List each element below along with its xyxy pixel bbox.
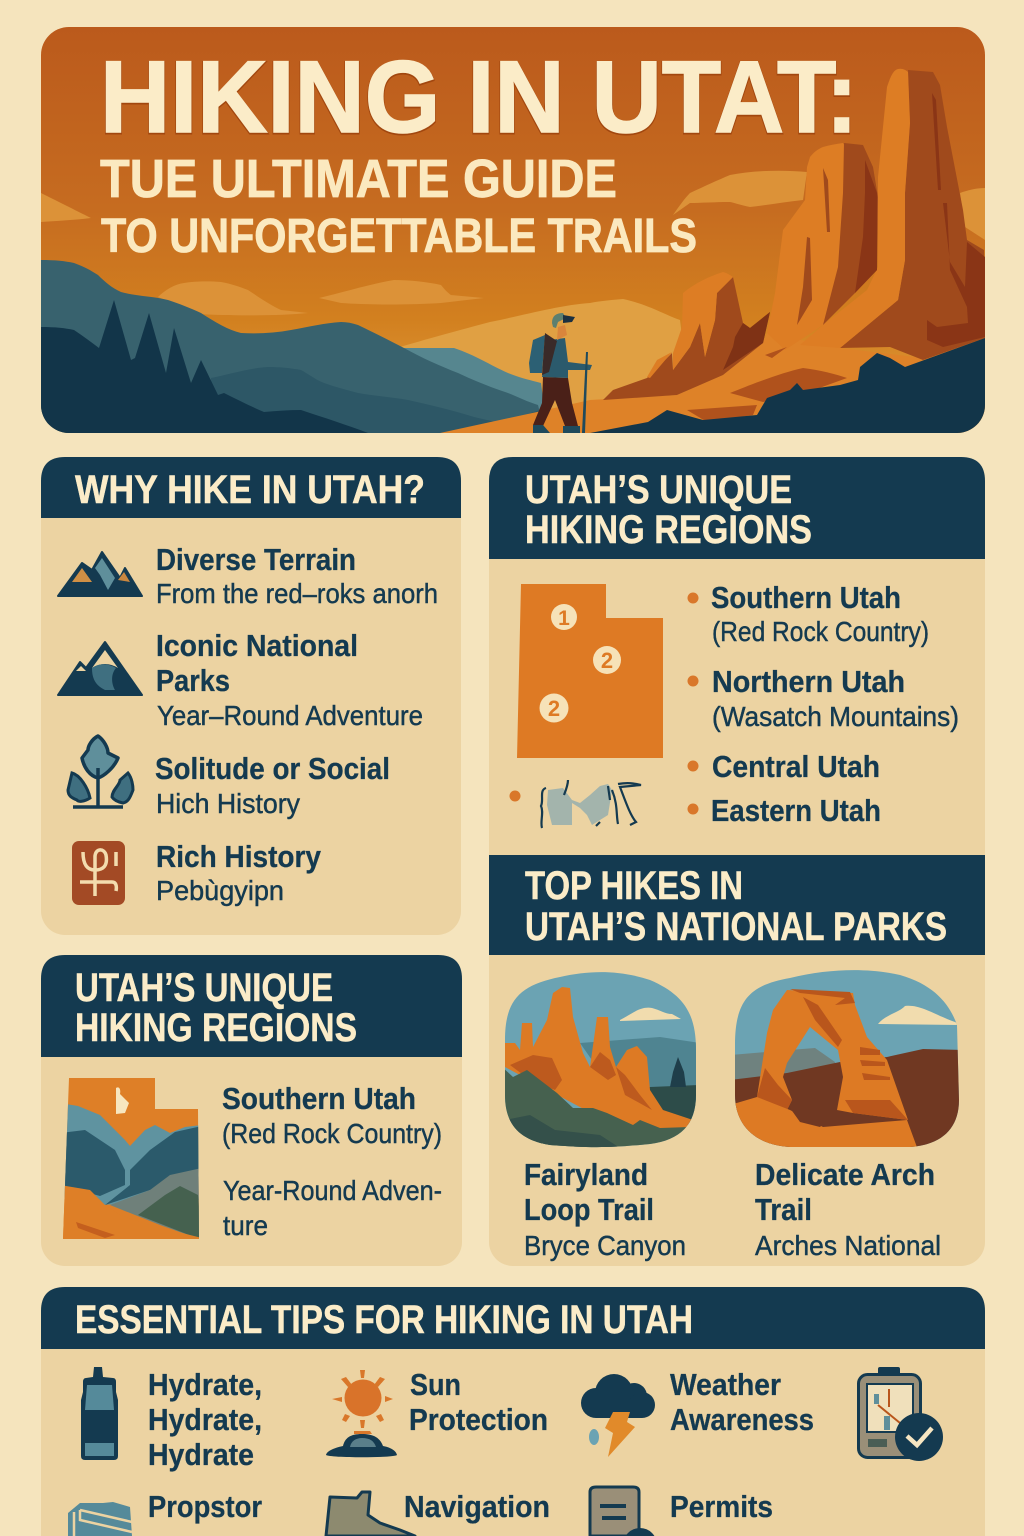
icon: map fold xyxy=(68,1502,132,1536)
main rock tower xyxy=(800,69,985,360)
text: Fairyland loop trail: Bryce Canyon xyxy=(524,1230,686,1261)
hero title: HIKING IN UTAT: xyxy=(100,40,858,154)
text: diverse terrain: Diverse Terrain xyxy=(156,542,356,577)
text: hydrate: Hydrate, xyxy=(148,1367,262,1402)
icon: sun and hat xyxy=(326,1370,397,1457)
panel: essential tips xyxy=(41,1287,985,1536)
header: top hikes: TOP HIKES IN xyxy=(525,864,743,908)
text: weather awareness xyxy=(670,1367,814,1437)
header: Utah's unique hiking regions: HIKING REGIONS xyxy=(525,508,812,552)
region list xyxy=(688,580,959,828)
region list: (Wasatch Mountains) xyxy=(712,701,959,732)
region list: Northern Utah xyxy=(712,664,905,699)
text: southern Utah: ture xyxy=(223,1210,268,1241)
text: iconic national parks: Year–Round Adventure xyxy=(157,700,423,731)
text: sun protection xyxy=(409,1367,548,1437)
hero title: TO UNFORGETTABLE TRAILS xyxy=(101,210,697,263)
hero banner xyxy=(41,27,985,433)
text: southern Utah: (Red Rock Country) xyxy=(222,1118,442,1149)
far blue ridge xyxy=(404,348,542,410)
region list: Eastern Utah xyxy=(711,793,881,828)
text: sun protection: Sun xyxy=(410,1367,461,1402)
Utah region map: 2 xyxy=(601,648,613,673)
text: solitude or social xyxy=(155,751,390,819)
text: iconic national parks: Parks xyxy=(156,663,230,698)
icon: national park peak xyxy=(58,642,142,695)
text: iconic national parks: Iconic National xyxy=(156,628,358,663)
illustration: Delicate Arch xyxy=(730,965,962,1150)
second rock tower xyxy=(767,143,878,350)
Utah region map: 1 xyxy=(558,607,570,630)
rock base shadows xyxy=(687,347,847,422)
text: Delicate Arch trail: Arches National xyxy=(755,1230,941,1261)
map legend squiggle xyxy=(510,780,641,828)
mid hill xyxy=(211,367,540,433)
header: Utah's unique hiking regions xyxy=(489,457,985,559)
right shrubs xyxy=(590,338,985,433)
text: rich history: Pebùgyipn xyxy=(156,875,284,906)
text: weather awareness: Weather xyxy=(670,1367,781,1402)
icon: tree xyxy=(68,736,133,807)
icon: rock glyph xyxy=(72,841,125,905)
text: sun protection: Protection xyxy=(409,1402,548,1437)
Utah region map: 2 xyxy=(548,696,560,721)
text: hydrate xyxy=(148,1367,262,1472)
header: top hikes xyxy=(489,855,985,955)
text: rich history: Rich History xyxy=(156,839,322,874)
illustrated Utah map xyxy=(60,1075,202,1243)
panel: Utah's unique hiking regions (left) xyxy=(41,955,462,1266)
panel: essential tips: ESSENTIAL TIPS FOR HIKING IN UTAH xyxy=(75,1298,693,1342)
icon: GPS device with check xyxy=(858,1367,943,1461)
header: Utah's unique hiking regions: UTAH’S UNIQUE xyxy=(525,468,792,512)
text: southern Utah: Year-Round Adven- xyxy=(223,1175,442,1206)
hero title: TUE ULTIMATE GUIDE xyxy=(100,149,617,209)
text: iconic national parks xyxy=(156,628,423,731)
text: solitude or social: Hich History xyxy=(156,788,300,819)
panel: Utah's unique hiking regions (left): HIKING REGIONS xyxy=(75,1006,357,1050)
third rock xyxy=(603,272,770,400)
text: propstor: Propstor xyxy=(148,1489,262,1524)
Utah region map xyxy=(517,584,663,758)
text: southern Utah: Southern Utah xyxy=(222,1081,416,1116)
text: navigation: Navigation xyxy=(404,1489,550,1524)
text: Fairyland loop trail: Loop Trail xyxy=(524,1192,654,1227)
text: Fairyland loop trail xyxy=(524,1157,686,1261)
sky clouds xyxy=(41,171,985,412)
icon: permit clipboard xyxy=(590,1487,657,1536)
icon: mountain range xyxy=(58,552,142,596)
text: hydrate: Hydrate xyxy=(148,1437,254,1472)
header: top hikes: UTAH’S NATIONAL PARKS xyxy=(525,905,947,949)
text: Fairyland loop trail: Fairyland xyxy=(524,1157,648,1192)
front dark hill with trees xyxy=(41,300,368,433)
text: diverse terrain: From the red–roks anorh xyxy=(156,578,438,609)
ground xyxy=(440,333,985,433)
text: Delicate Arch trail: Delicate Arch xyxy=(755,1157,935,1192)
text: hydrate: Hydrate, xyxy=(148,1402,262,1437)
text: Delicate Arch trail: Trail xyxy=(755,1192,812,1227)
text: southern Utah xyxy=(222,1081,442,1241)
hero title: HIKING IN UTAT: xyxy=(100,41,858,155)
region list: (Red Rock Country) xyxy=(712,616,929,647)
region list: Central Utah xyxy=(712,749,880,784)
panel: why hike in Utah xyxy=(41,457,461,935)
icon: water bottle xyxy=(81,1367,118,1460)
text: solitude or social: Solitude or Social xyxy=(155,751,390,786)
teal mountains xyxy=(41,260,545,433)
text: rich history xyxy=(156,839,322,906)
hiker xyxy=(529,313,592,433)
text: permits: Permits xyxy=(670,1489,773,1524)
panel: why hike in Utah: WHY HIKE IN UTAH? xyxy=(75,468,425,512)
text: diverse terrain xyxy=(156,542,438,609)
text: weather awareness: Awareness xyxy=(670,1402,814,1437)
region list: Southern Utah xyxy=(711,580,901,615)
panel: right column xyxy=(489,457,985,1266)
panel: Utah's unique hiking regions (left): UTAH’S UNIQUE xyxy=(75,966,333,1010)
text: Delicate Arch trail xyxy=(755,1157,941,1261)
icon: storm cloud xyxy=(581,1374,655,1457)
illustration: Fairyland hoodoos xyxy=(500,965,700,1150)
hero title xyxy=(100,40,858,263)
icon: hiking boot xyxy=(326,1492,415,1536)
